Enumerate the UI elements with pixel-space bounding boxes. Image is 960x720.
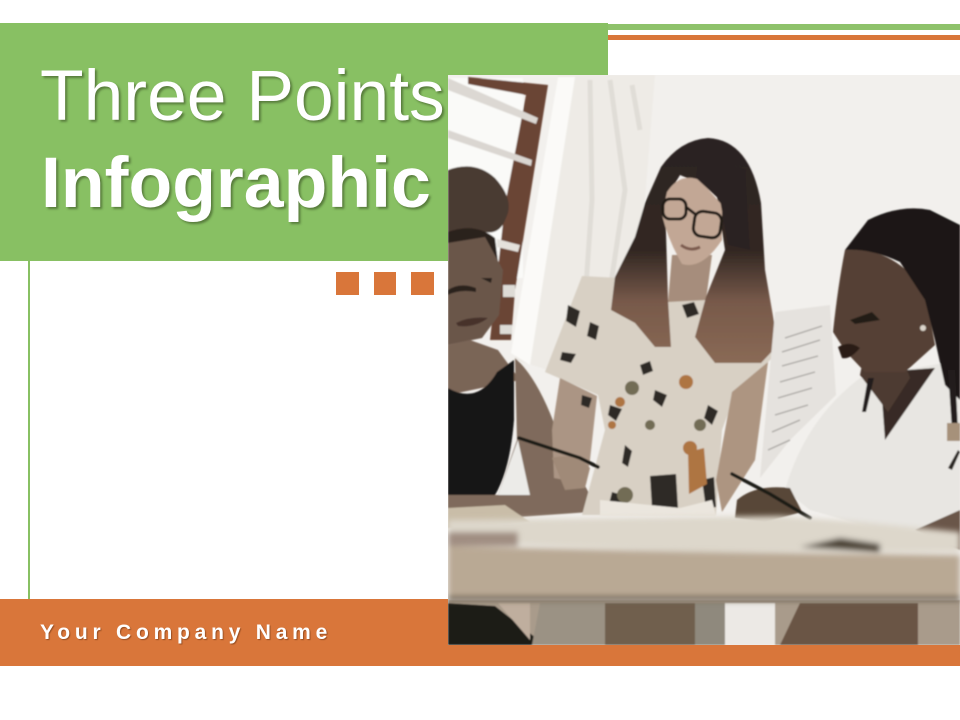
orange footer band bbox=[0, 599, 448, 666]
under table bbox=[448, 600, 960, 645]
shirt bbox=[785, 360, 960, 530]
green title panel bbox=[0, 23, 448, 261]
arms bbox=[552, 378, 597, 484]
photo: three women working at a table bbox=[448, 75, 960, 645]
left woman bbox=[448, 166, 590, 528]
company name: Your Company Name bbox=[40, 621, 332, 644]
right woman bbox=[735, 208, 960, 550]
middle woman bbox=[545, 138, 780, 516]
curtain bbox=[511, 75, 655, 372]
pens bbox=[519, 438, 810, 518]
three orange squares bbox=[336, 272, 434, 295]
paper on wall bbox=[760, 305, 836, 478]
face bbox=[662, 178, 722, 265]
left vertical green line bbox=[28, 261, 30, 599]
window bbox=[448, 77, 548, 340]
dress bbox=[545, 276, 780, 515]
hand bbox=[735, 487, 802, 522]
left hand bbox=[552, 456, 590, 490]
top right orange rule bbox=[608, 35, 960, 40]
book and table top bbox=[448, 516, 960, 601]
green top extension bbox=[448, 23, 608, 75]
floral print bbox=[560, 298, 761, 509]
glasses bbox=[663, 199, 723, 239]
braids bbox=[845, 208, 960, 400]
top right green rule bbox=[608, 24, 960, 30]
hair bbox=[611, 138, 778, 363]
face bbox=[833, 250, 935, 372]
title line two: Infographic bbox=[41, 143, 431, 223]
orange band under photo bbox=[448, 645, 960, 666]
title line one: Three Points bbox=[40, 56, 445, 136]
neck bbox=[668, 255, 712, 302]
